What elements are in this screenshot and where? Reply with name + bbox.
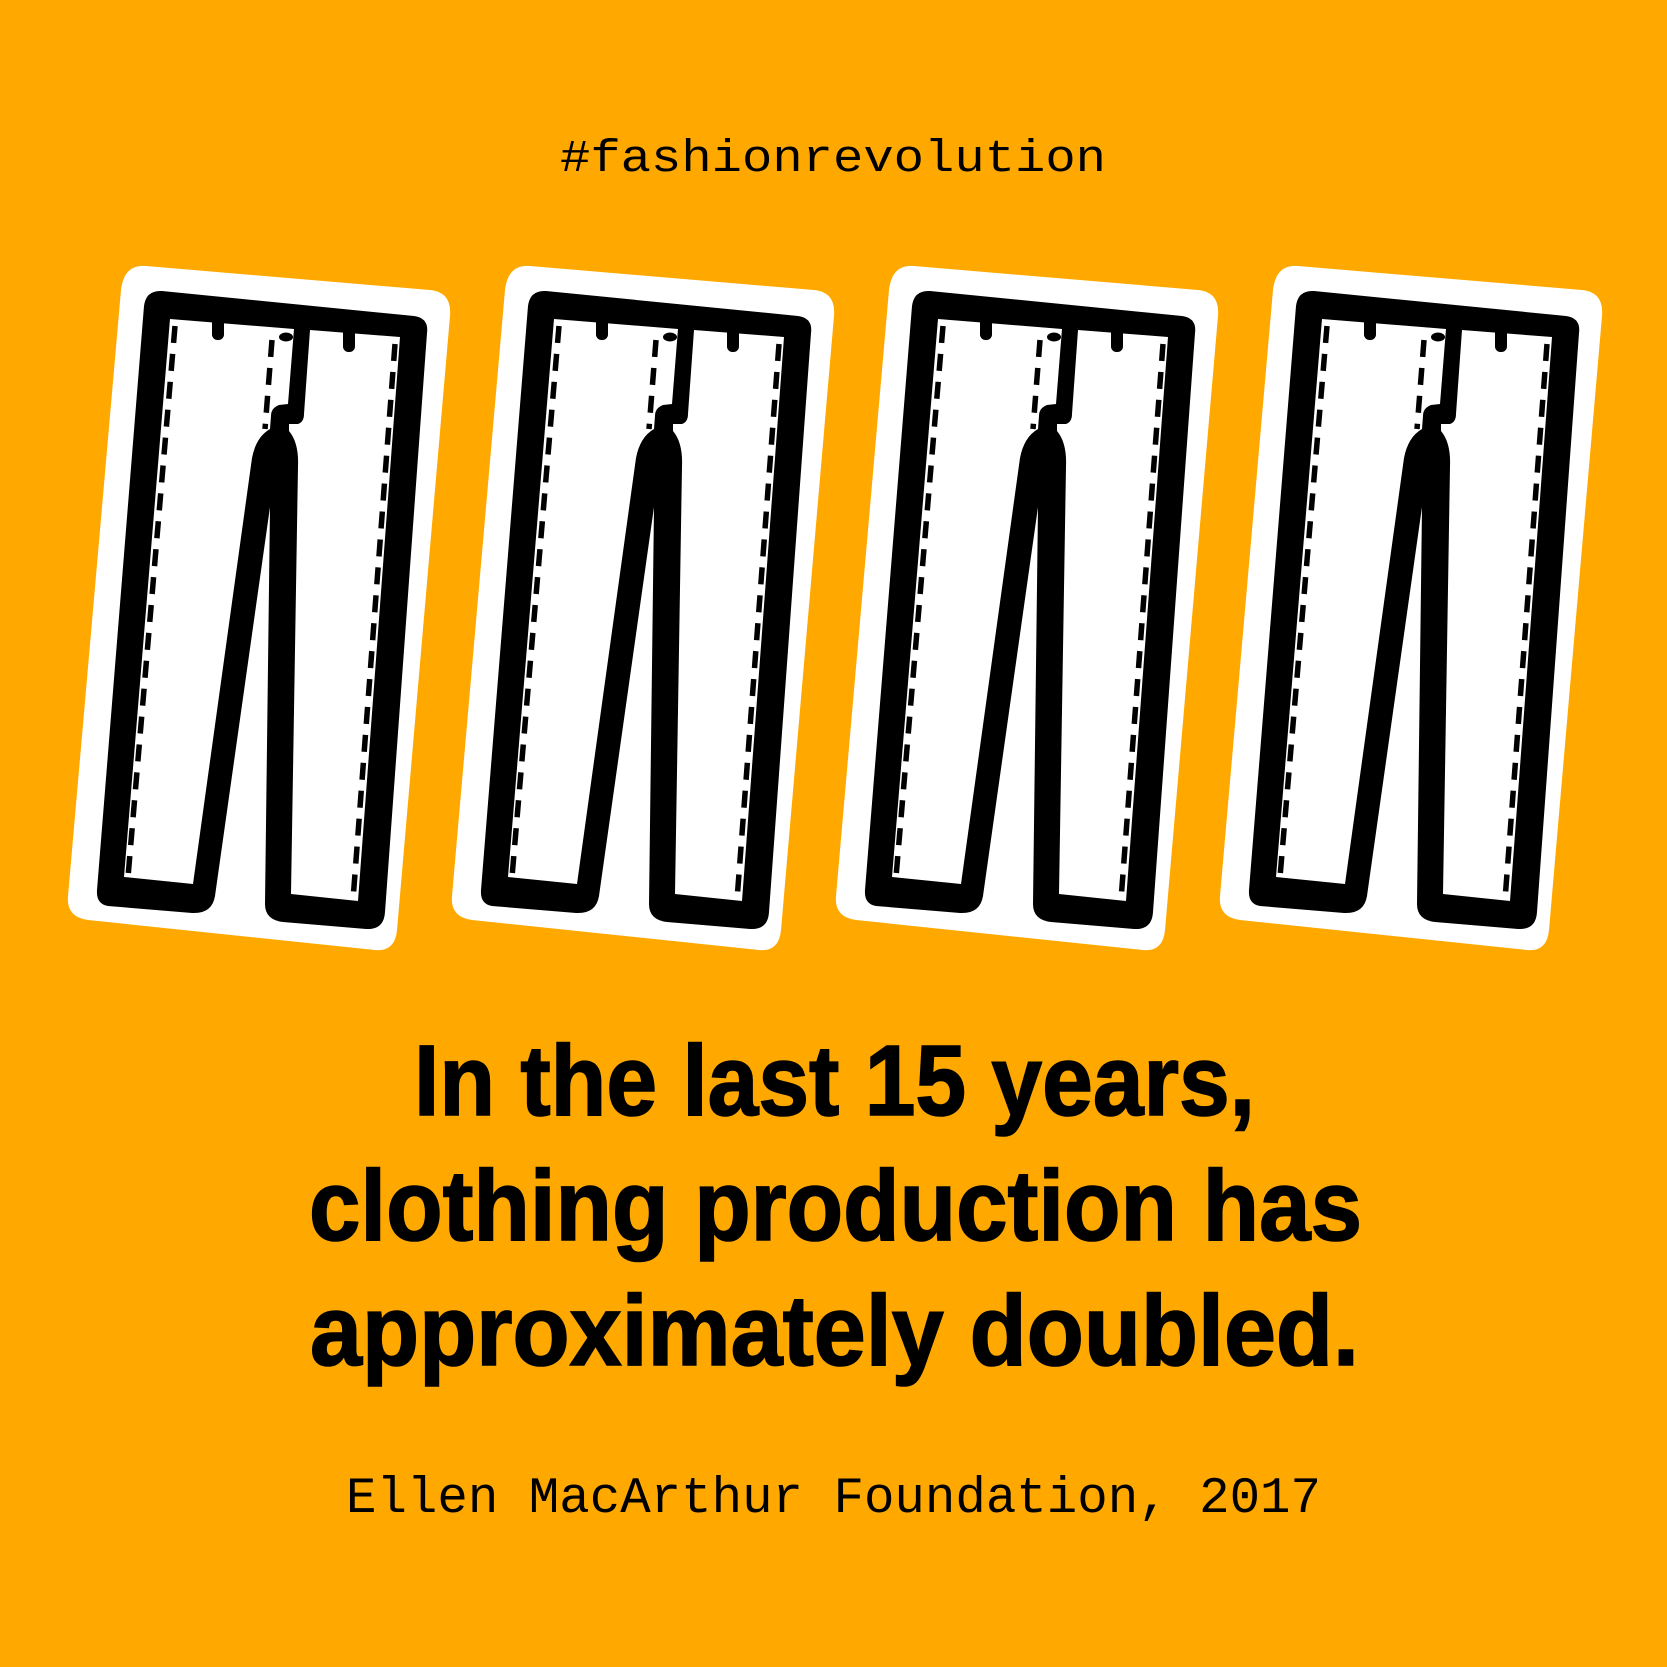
source credit: Ellen MacArthur Foundation, 2017 — [346, 1471, 1321, 1528]
icon: jeans sticker 3 — [836, 266, 1218, 950]
icon: jeans sticker 1 — [68, 266, 450, 950]
hashtag: #fashionrevolution — [560, 133, 1106, 185]
icon: jeans sticker 4 — [1220, 266, 1602, 950]
icon: jeans sticker 2 — [452, 266, 834, 950]
headline: In the last 15 years, — [414, 1025, 1255, 1137]
headline: clothing production has — [309, 1150, 1362, 1262]
headline — [309, 1025, 1362, 1387]
headline: approximately doubled. — [310, 1275, 1359, 1387]
